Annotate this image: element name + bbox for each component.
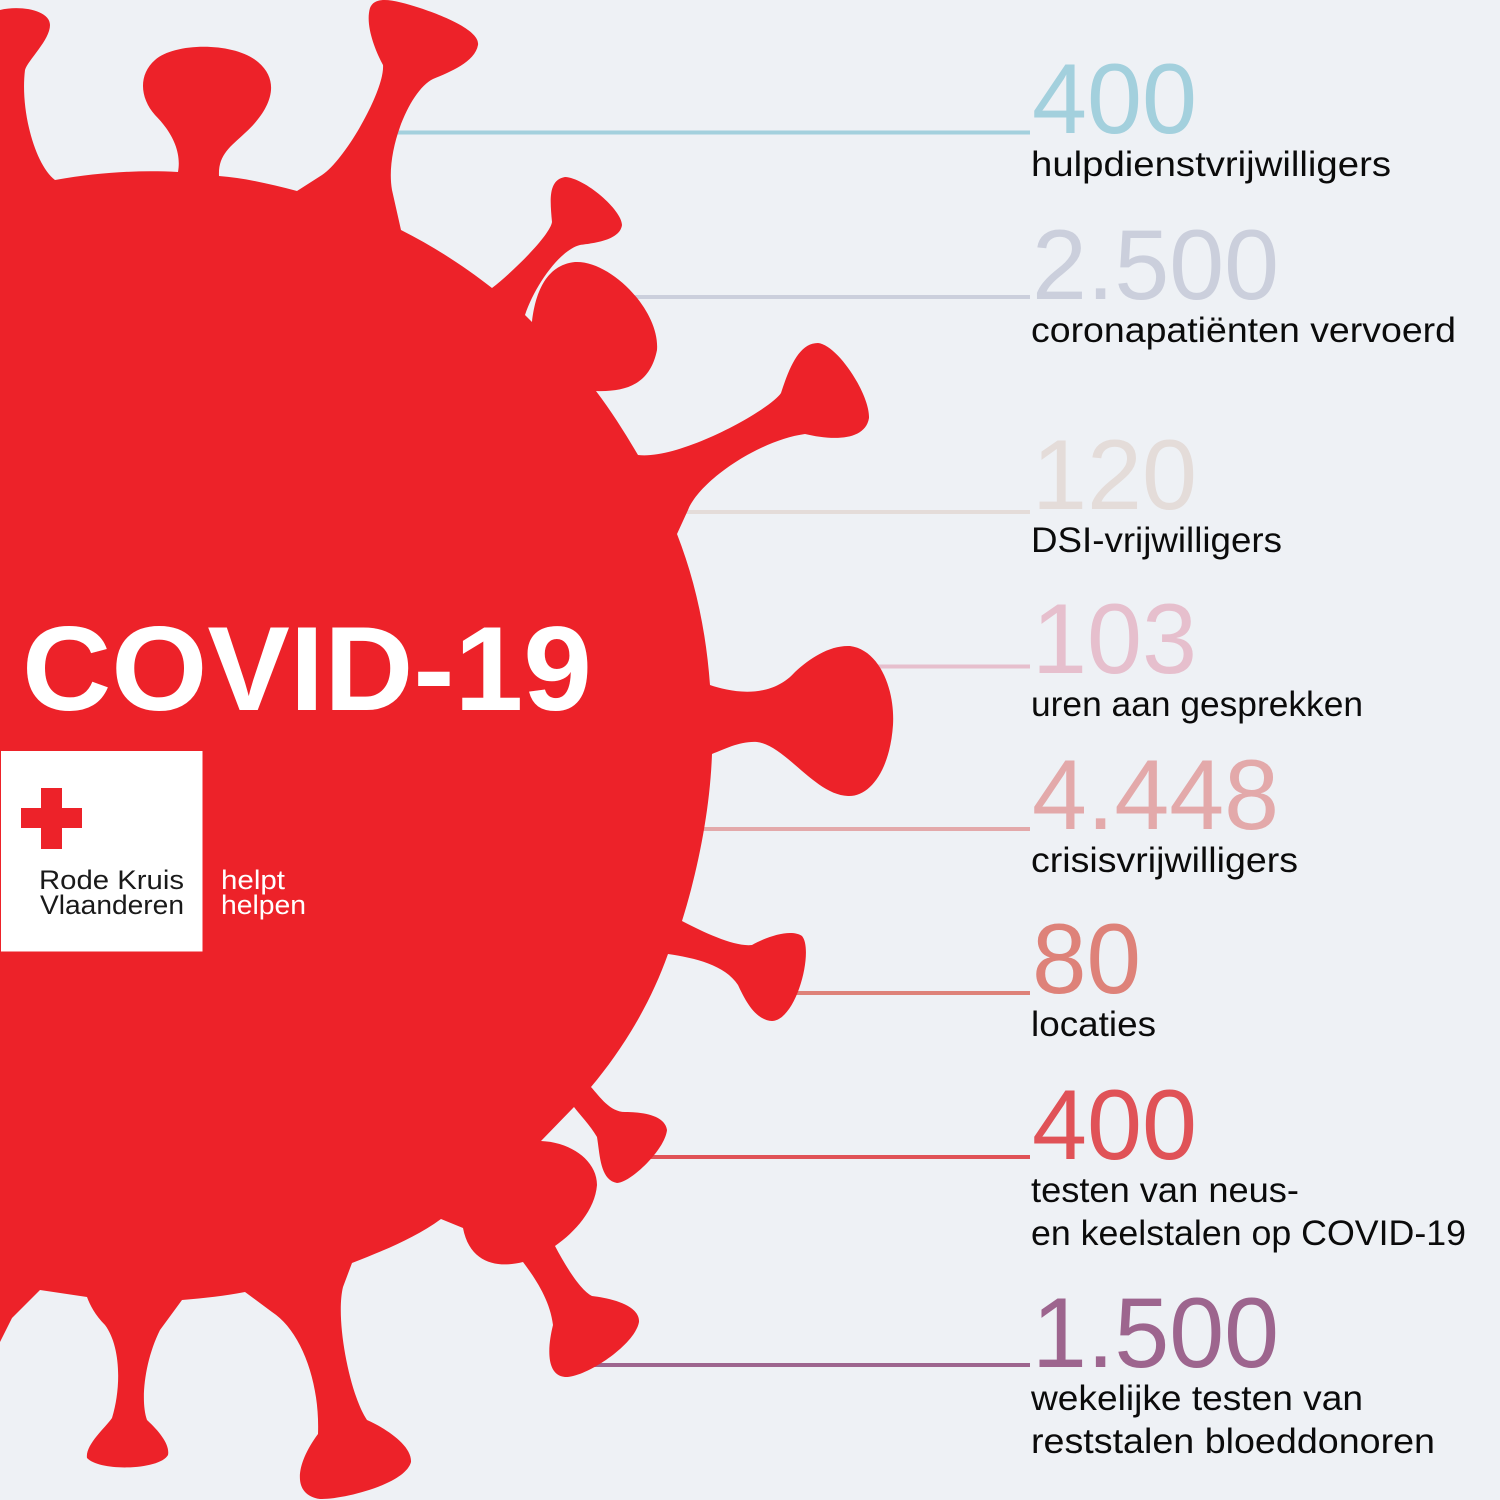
slogan: helpt	[221, 865, 286, 895]
logo wordmark	[39, 865, 184, 920]
stat: 1.500 wekelijke testen: reststalen bloeddonoren	[1031, 1422, 1435, 1461]
stat: 2.500 coronapatienten vervoerd: 2.500	[1032, 209, 1279, 320]
title: COVID-19	[22, 602, 592, 736]
logo wordmark: Vlaanderen	[40, 890, 184, 920]
logo: Rode Kruis Vlaanderen	[1, 751, 202, 952]
stat: 400 testen: en keelstalen op COVID-19	[1031, 1214, 1466, 1253]
stat: 1.500 wekelijke testen	[1030, 1277, 1435, 1461]
slogan: helpen	[221, 890, 306, 920]
stat: 1.500 wekelijke testen: 1.500	[1032, 1277, 1279, 1388]
stat: 4.448 crisisvrijwilligers: crisisvrijwilligers	[1031, 841, 1298, 880]
stat: 103 uren aan gesprekken: uren aan gesprekken	[1031, 685, 1363, 724]
stat: 80 locaties	[1031, 903, 1156, 1044]
stat: 400 testen	[1031, 1069, 1466, 1253]
stat: 120 DSI-vrijwilligers	[1031, 419, 1282, 560]
stat: 400 hulpdienstvrijwilligers: hulpdienstvrijwilligers	[1031, 145, 1391, 184]
stat: 80 locaties: 80	[1032, 903, 1141, 1014]
connector lines	[395, 132, 1030, 1365]
stat: 120 DSI-vrijwilligers: DSI-vrijwilligers	[1031, 521, 1282, 560]
stat: 400 testen: testen van neus-	[1031, 1171, 1299, 1210]
stat: 4.448 crisisvrijwilligers: 4.448	[1032, 739, 1279, 850]
stat: 400 hulpdienstvrijwilligers: 400	[1032, 43, 1197, 154]
icon: red cross	[21, 788, 82, 849]
stat: 2.500 coronapatienten vervoerd	[1031, 209, 1456, 350]
stat: 2.500 coronapatienten vervoerd: coronapatiënten vervoerd	[1031, 311, 1456, 350]
stat: 120 DSI-vrijwilligers: 120	[1032, 419, 1197, 530]
logo wordmark: Rode Kruis	[39, 865, 184, 895]
stat: 103 uren aan gesprekken: 103	[1032, 583, 1197, 694]
slogan	[221, 865, 306, 920]
stat: 400 hulpdienstvrijwilligers	[1031, 43, 1391, 184]
virus illustration	[0, 0, 893, 1499]
stat: 80 locaties: locaties	[1031, 1005, 1156, 1044]
stat: 400 testen: 400	[1032, 1069, 1197, 1180]
stat: 1.500 wekelijke testen: wekelijke testen van	[1030, 1379, 1363, 1418]
stat: 103 uren aan gesprekken	[1031, 583, 1363, 724]
